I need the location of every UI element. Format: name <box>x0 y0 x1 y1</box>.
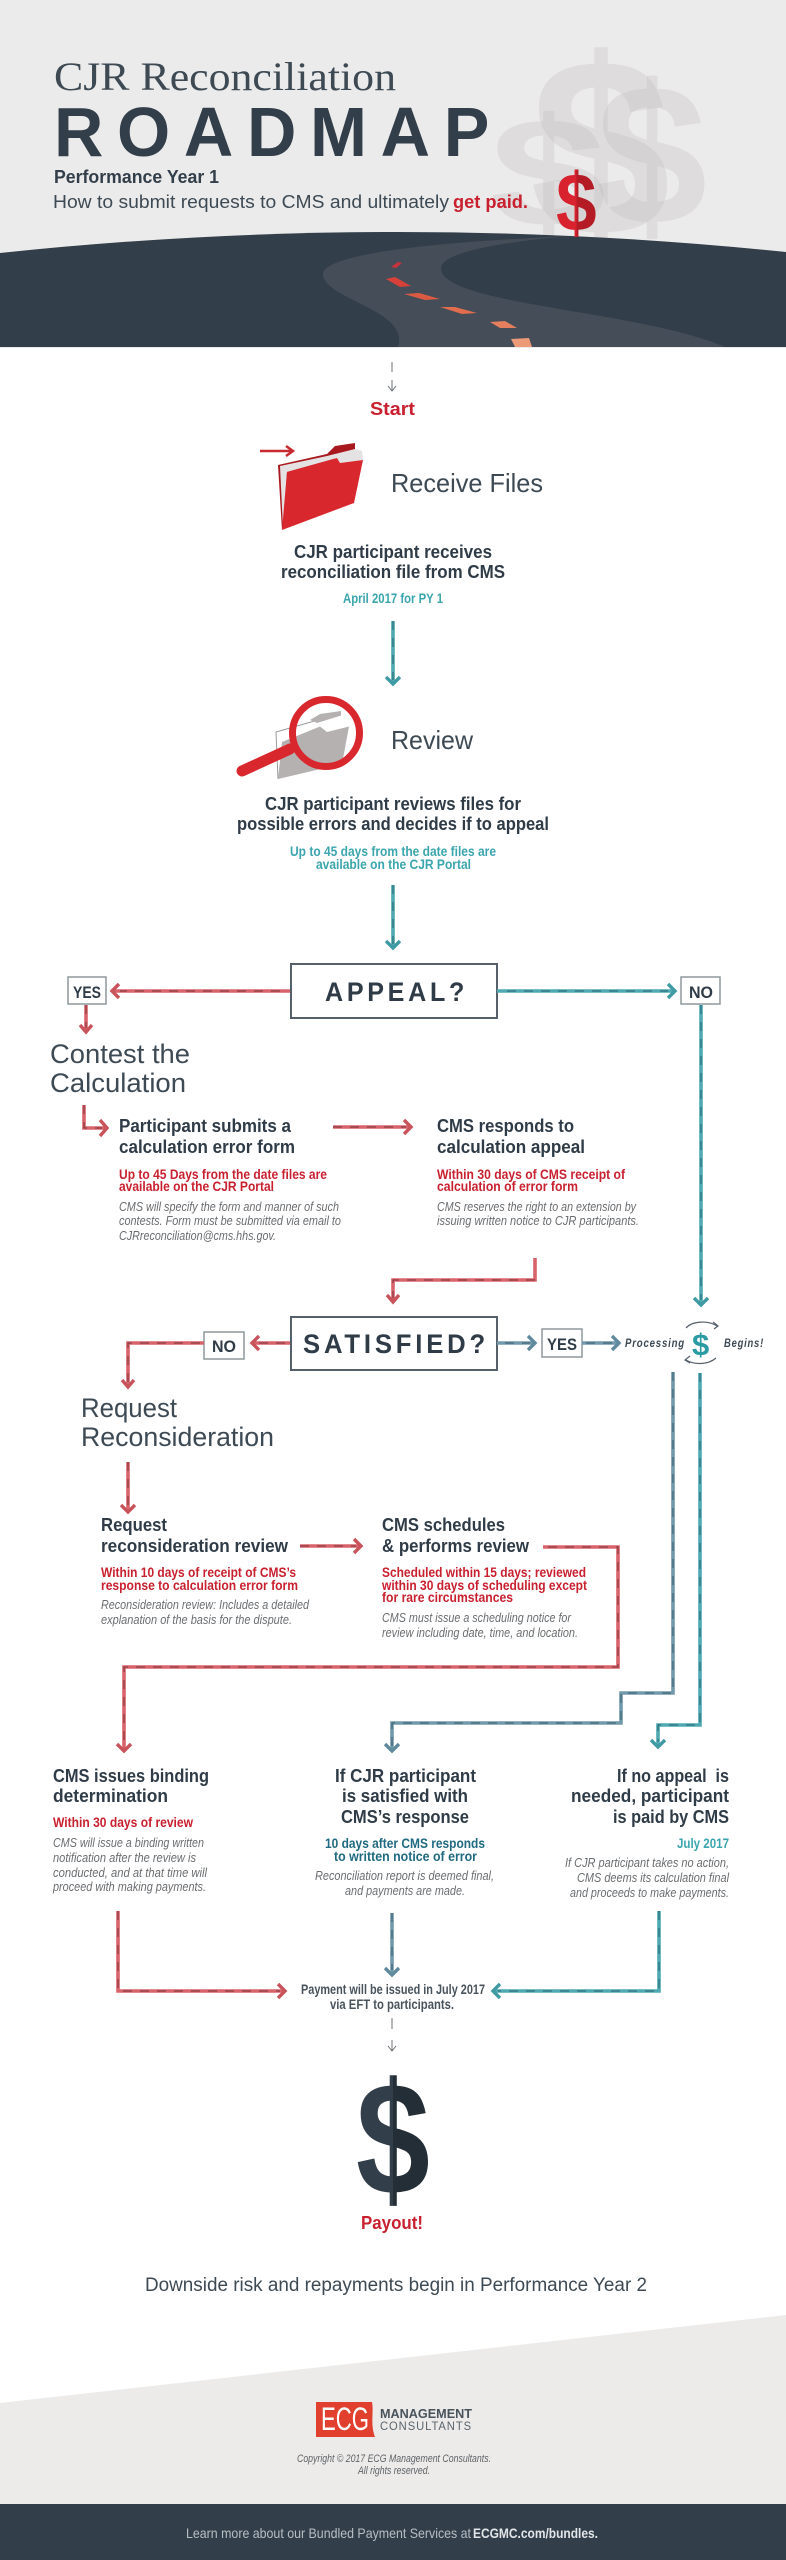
copyright <box>297 2453 491 2477</box>
arrow: yes path to satisfied column <box>385 1372 673 1751</box>
box: yes <box>542 1329 582 1357</box>
details <box>101 1598 310 1627</box>
heading <box>53 1766 209 1806</box>
heading: needed, participant <box>571 1786 729 1806</box>
deadline: for rare circumstances <box>382 1589 513 1605</box>
deadline: available on the CJR Portal <box>119 1178 274 1194</box>
arrow: no path to paid column <box>651 1373 700 1747</box>
step: receive files <box>260 443 543 606</box>
icon: teal dollar with cycle arrows: $ <box>692 1327 709 1362</box>
details: conducted, and at that time will <box>53 1866 208 1880</box>
text: receives reconciliation file: reconciliation file from CMS <box>281 562 505 582</box>
heading: is satisfied with <box>342 1786 468 1806</box>
arrow: review to appeal <box>386 885 400 948</box>
arrow: appeal to yes <box>112 984 290 998</box>
deadline: Scheduled within 15 days; reviewed <box>382 1564 586 1580</box>
heading: If no appeal is <box>617 1766 729 1786</box>
details: CJRreconciliation@cms.hhs.gov. <box>119 1229 276 1243</box>
step: cms schedules <box>381 1515 587 1640</box>
text: learn more: Learn more about our Bundled Payment Services at <box>186 2525 471 2541</box>
deadline: within 30 days of scheduling except <box>381 1577 587 1593</box>
logo: ECG Management Consultants <box>316 2401 472 2437</box>
label: Begins!: Begins! <box>724 1336 764 1350</box>
box: no: NO <box>212 1337 236 1356</box>
deadline: to written notice of error <box>334 1848 477 1864</box>
heading: CMS schedules <box>382 1515 505 1535</box>
tagline: get paid. <box>453 192 528 212</box>
outcome: no appeal needed <box>565 1766 730 1900</box>
outcome: satisfied with response <box>315 1766 494 1898</box>
box: yes: YES <box>73 983 101 1002</box>
arrow: to reconsideration review <box>121 1462 135 1512</box>
label: Processing: Processing <box>625 1336 685 1350</box>
heading: contest the calculation <box>50 1039 190 1098</box>
heading: determination <box>53 1786 168 1806</box>
heading: request reconsideration: Request <box>81 1393 177 1423</box>
date: up to 45 days <box>290 843 496 872</box>
arrow: binding to payment <box>118 1911 285 1998</box>
icon: ghost dollar signs: $ <box>530 6 671 289</box>
deadline <box>381 1564 587 1605</box>
details: and proceeds to make payments. <box>570 1886 729 1900</box>
outcome: binding determination <box>52 1766 209 1894</box>
arrow: no appeal to payment <box>493 1911 659 1998</box>
heading: reconsideration review <box>101 1536 289 1556</box>
deadline: Within 30 days of review <box>53 1814 193 1830</box>
deadline <box>325 1835 485 1864</box>
details: notification after the review is <box>53 1851 196 1865</box>
box: yes <box>68 977 106 1004</box>
arrow: yes to processing <box>582 1336 619 1350</box>
arrow: cms responds to satisfied <box>387 1258 535 1302</box>
logo: ECG Management Consultants: ECG <box>321 2401 369 2437</box>
details: Reconciliation report is deemed final, <box>315 1869 494 1883</box>
label: Start: Start <box>370 399 415 419</box>
heading: Request <box>101 1515 167 1535</box>
heading <box>571 1766 729 1827</box>
heading: CMS issues binding <box>53 1766 209 1786</box>
box: yes: YES <box>547 1335 577 1354</box>
arrow: satisfied to payment <box>385 1913 399 1975</box>
arrow: no to request reconsideration <box>122 1343 204 1387</box>
details: review including date, time, and location. <box>382 1626 578 1640</box>
deadline: Within 30 days of CMS receipt of <box>437 1166 625 1182</box>
decision: appeal <box>291 964 497 1018</box>
text: receives reconciliation file <box>281 542 505 582</box>
heading: CMS’s response <box>341 1807 469 1827</box>
decision: appeal: APPEAL? <box>325 977 468 1007</box>
deadline: Up to 45 Days from the date files are <box>119 1166 327 1182</box>
heading <box>119 1116 295 1157</box>
heading: & performs review <box>382 1536 530 1556</box>
text: learn more: ECGMC.com/bundles. <box>473 2525 598 2541</box>
arrow: review to schedules <box>300 1539 361 1553</box>
date: up to 45 days: Up to 45 days from the date files are <box>290 843 496 859</box>
details: explanation of the basis for the dispute. <box>101 1613 292 1627</box>
heading: Participant submits a <box>119 1116 292 1136</box>
heading <box>437 1116 585 1157</box>
arrow: contest to submit form <box>84 1105 107 1136</box>
arrow: receive to review <box>386 621 400 684</box>
box: no <box>681 977 720 1004</box>
icon: red dollar sign: $ <box>556 156 597 249</box>
heading: is paid by CMS <box>613 1807 729 1827</box>
logo: ECG Management Consultants: CONSULTANTS <box>380 2419 472 2433</box>
arrow: no to processing <box>694 1005 708 1305</box>
heading: Receive Files: Receive Files <box>391 468 543 498</box>
title: CJR Reconciliation: CJR Reconciliation <box>54 54 396 99</box>
details: CMS will specify the form and manner of such <box>119 1200 339 1214</box>
illustration: hill <box>0 232 786 347</box>
text: payment issued: via EFT to participants. <box>330 1996 454 2012</box>
box: no: NO <box>689 983 713 1002</box>
heading: request reconsideration <box>81 1393 274 1452</box>
date: April 2017: April 2017 for PY 1 <box>343 590 443 606</box>
deadline <box>101 1564 298 1593</box>
details: CMS must issue a scheduling notice for <box>382 1611 572 1625</box>
details <box>119 1200 341 1243</box>
tagline: How to submit requests to CMS and ultimately <box>53 192 449 212</box>
icon: magnifier over folder <box>242 700 360 779</box>
heading: If CJR participant <box>335 1766 476 1786</box>
date: up to 45 days: available on the CJR Portal <box>316 856 471 872</box>
step: participant submits form <box>119 1116 341 1243</box>
text: downside risk note: Downside risk and repayments begin in Performance Year 2 <box>145 2275 647 2296</box>
heading <box>335 1766 476 1827</box>
heading <box>382 1515 530 1556</box>
deadline <box>437 1166 625 1194</box>
details: CMS deems its calculation final <box>577 1871 730 1885</box>
arrow: submit to cms responds <box>333 1120 411 1134</box>
details: contests. Form must be submitted via email to <box>119 1214 341 1228</box>
details: Reconsideration review: Includes a detailed <box>101 1598 310 1612</box>
processing begins <box>625 1322 764 1364</box>
heading: contest the calculation: Contest the <box>50 1039 190 1069</box>
heading: CMS responds to <box>437 1116 574 1136</box>
illustration: winding road <box>323 236 725 347</box>
text: payment issued: Payment will be issued in July 2017 <box>301 1981 485 1997</box>
arrow: satisfied to no <box>252 1336 290 1350</box>
date: July 2017 <box>677 1835 729 1851</box>
arrow: satisfied to yes <box>497 1336 535 1350</box>
text: payment issued <box>301 1981 485 2012</box>
text: receives reconciliation file: CJR participant receives <box>294 542 492 562</box>
details: CMS will issue a binding written <box>53 1836 204 1850</box>
details: proceed with making payments. <box>52 1880 206 1894</box>
arrow: to payout <box>388 2018 396 2051</box>
box: no <box>204 1332 244 1359</box>
details <box>437 1200 639 1228</box>
arrow: yes to contest <box>80 1005 92 1032</box>
details: and payments are made. <box>345 1884 465 1898</box>
icon: ghost dollar signs: $ <box>596 44 707 267</box>
decision: satisfied: SATISFIED? <box>303 1329 489 1359</box>
step: review <box>237 700 549 872</box>
heading: contest the calculation: Calculation <box>50 1068 186 1098</box>
footer bar <box>0 2504 786 2560</box>
details <box>382 1611 578 1640</box>
text: reviews files <box>237 794 549 834</box>
arrow: start <box>388 362 396 391</box>
details <box>52 1836 208 1894</box>
copyright: Copyright © 2017 ECG Management Consultants. <box>297 2453 491 2465</box>
arrow: appeal to no <box>497 984 675 998</box>
heading: Review: Review <box>391 725 473 755</box>
header banner <box>0 0 786 348</box>
icon: payout dollar: $ <box>356 2050 430 2229</box>
details <box>315 1869 494 1898</box>
title: ROADMAP: ROADMAP <box>54 93 503 171</box>
details <box>565 1856 730 1900</box>
logo: ECG Management Consultants: MANAGEMENT <box>380 2406 472 2421</box>
start marker <box>370 362 415 419</box>
deadline: calculation of error form <box>437 1178 578 1194</box>
footer panel <box>0 2315 786 2504</box>
heading: calculation appeal <box>437 1137 585 1157</box>
step: request reconsideration review <box>101 1515 310 1627</box>
text: reviews files: CJR participant reviews files for <box>265 794 521 814</box>
details: If CJR participant takes no action, <box>565 1856 729 1870</box>
icon: ghost dollar signs <box>490 6 707 289</box>
step: cms responds <box>437 1116 639 1228</box>
copyright: All rights reserved. <box>357 2465 430 2477</box>
icon: red folder with arrow <box>260 443 363 530</box>
deadline: Within 10 days of receipt of CMS’s <box>101 1564 296 1580</box>
decision: satisfied <box>291 1317 497 1370</box>
deadline: response to calculation error form <box>101 1577 298 1593</box>
deadline: 10 days after CMS responds <box>325 1835 485 1851</box>
arrow: schedules to binding determination <box>117 1547 618 1751</box>
deadline <box>119 1166 327 1194</box>
heading: request reconsideration: Reconsideration <box>81 1422 274 1452</box>
details: issuing written notice to CJR participants. <box>437 1214 639 1228</box>
icon: ghost dollar signs: $ <box>490 86 606 260</box>
heading <box>101 1515 289 1556</box>
label: Payout!: Payout! <box>361 2213 423 2233</box>
subtitle: Performance Year 1: Performance Year 1 <box>54 167 219 187</box>
text: reviews files: possible errors and decides if to appeal <box>237 814 549 834</box>
heading: calculation error form <box>119 1137 295 1157</box>
details: CMS reserves the right to an extension by <box>437 1200 637 1214</box>
